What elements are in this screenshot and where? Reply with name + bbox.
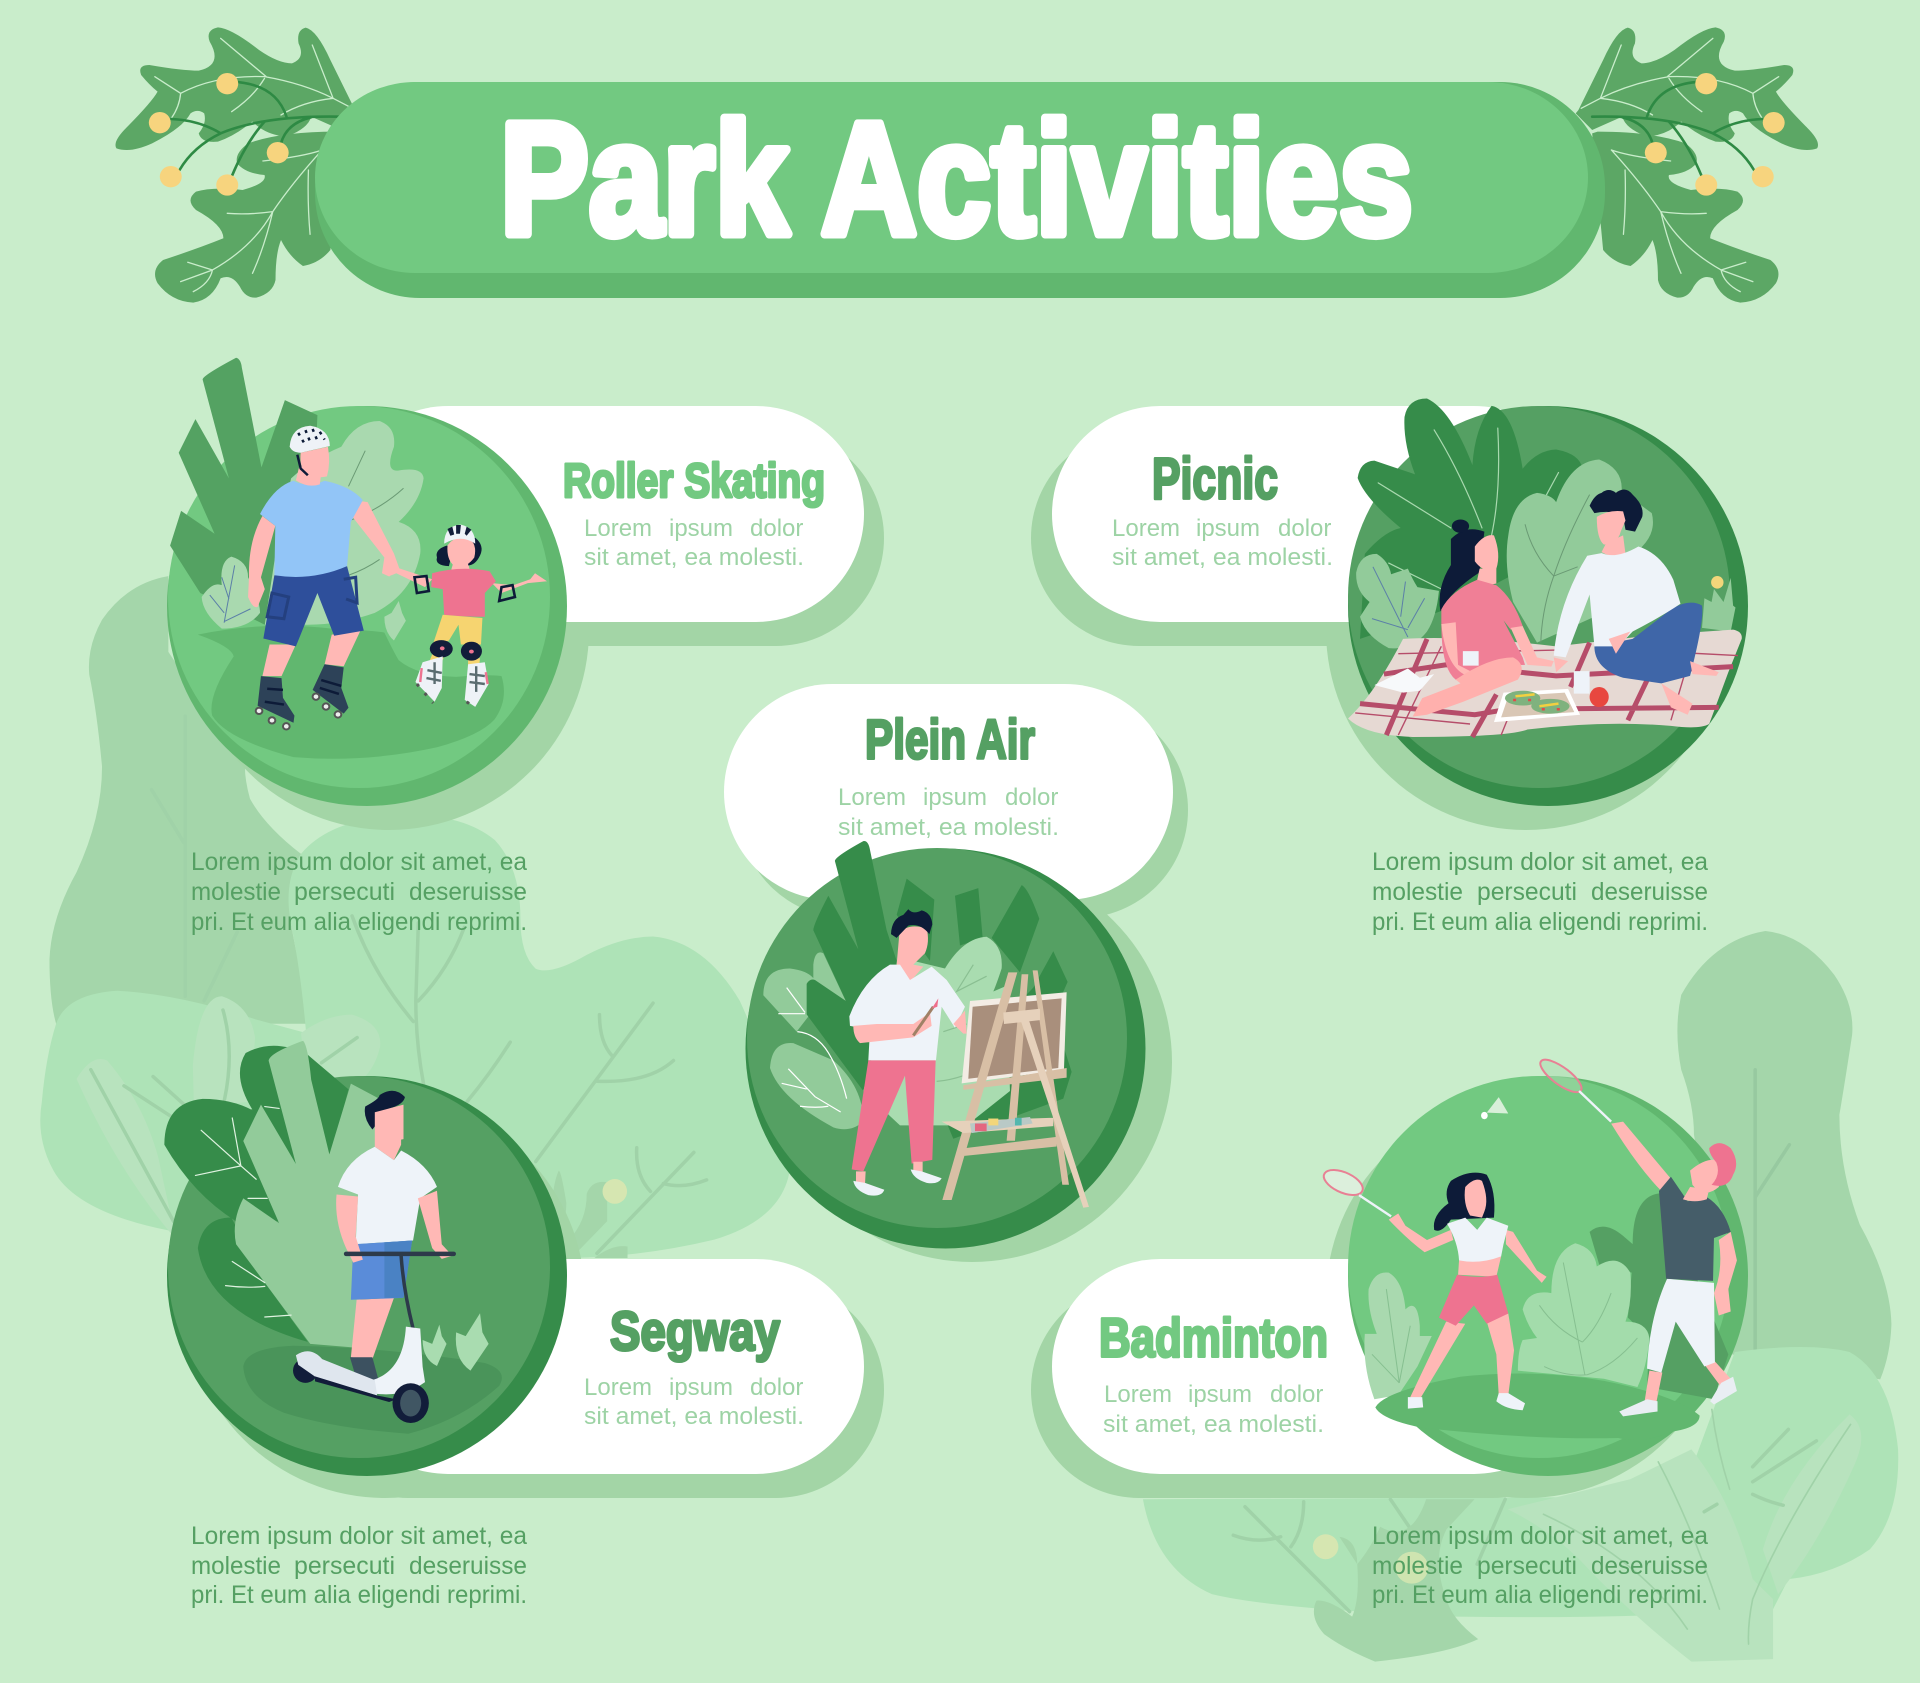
segway text: Lorem xyxy=(584,1374,652,1401)
badminton text: ipsum xyxy=(1188,1381,1252,1408)
paragraph: roller skating: persecuti xyxy=(294,878,395,906)
badminton text: sit amet, ea molesti. xyxy=(1103,1411,1324,1438)
roller skating circle xyxy=(167,406,567,806)
segway text: sit amet, ea molesti. xyxy=(584,1403,804,1430)
badminton text: dolor xyxy=(1270,1381,1323,1408)
paragraph: badminton: Lorem ipsum dolor sit amet, ea xyxy=(1372,1522,1708,1550)
panel: roller skating xyxy=(167,358,884,830)
paragraph: roller skating: deseruisse xyxy=(409,878,527,906)
picnic shadow xyxy=(1031,430,1726,830)
illustration: man on electric scooter xyxy=(164,1041,502,1434)
illustration: couple playing badminton xyxy=(1319,1055,1737,1440)
badminton text: Lorem xyxy=(1104,1381,1172,1408)
paragraph: badminton xyxy=(1372,1522,1708,1609)
roller skating heading: Roller Skating xyxy=(563,455,825,508)
segway text: dolor xyxy=(750,1374,803,1401)
panel: badminton xyxy=(1031,1055,1748,1498)
badminton text xyxy=(1103,1381,1324,1438)
plein air text: sit amet, ea molesti. xyxy=(838,814,1059,841)
paragraph: roller skating: molestie xyxy=(191,878,281,906)
paragraph: badminton: pri. Et eum alia eligendi reprimi. xyxy=(1372,1581,1708,1609)
badminton heading: Badminton xyxy=(1099,1306,1328,1368)
roller skating pill xyxy=(340,406,864,622)
plein air text: dolor xyxy=(1005,784,1058,811)
segway circle xyxy=(167,1076,567,1476)
panel: segway xyxy=(164,1041,884,1498)
roller skating text: dolor xyxy=(750,515,803,542)
segway pill xyxy=(340,1259,864,1474)
panel: plein air xyxy=(724,684,1188,1262)
paragraph: roller skating xyxy=(191,848,527,936)
picnic text: ipsum xyxy=(1196,515,1260,542)
segway shadow xyxy=(185,1098,884,1498)
plein air circle xyxy=(746,848,1146,1248)
paragraph: picnic: molestie xyxy=(1372,878,1463,906)
roller skating shadow xyxy=(189,430,884,830)
header leaves: left cluster xyxy=(115,27,358,303)
plein air text: ipsum xyxy=(923,784,987,811)
segway heading: Segway xyxy=(610,1300,780,1362)
background foliage: right xyxy=(1143,931,1898,1662)
header leaves: right cluster xyxy=(1576,27,1818,303)
paragraph: segway: molestie xyxy=(191,1552,281,1580)
picnic circle xyxy=(1348,406,1748,806)
title banner xyxy=(315,82,1605,298)
paragraph: segway: persecuti xyxy=(294,1552,395,1580)
segway text: ipsum xyxy=(669,1374,733,1401)
paragraph: roller skating: pri. Et eum alia eligendi reprimi. xyxy=(191,908,527,936)
paragraph: roller skating: Lorem ipsum dolor sit amet, ea xyxy=(191,848,527,876)
paragraph: segway: deseruisse xyxy=(409,1552,527,1580)
paragraph: badminton: persecuti xyxy=(1477,1552,1577,1580)
picnic pill xyxy=(1052,406,1582,622)
panel: picnic xyxy=(1031,398,1748,830)
illustration: painter and easel xyxy=(763,841,1089,1208)
picnic text: Lorem xyxy=(1112,515,1180,542)
illustration: father and child on roller skates xyxy=(170,358,547,759)
plein air text: Lorem xyxy=(838,784,906,811)
paragraph: picnic: pri. Et eum alia eligendi reprimi. xyxy=(1372,908,1708,936)
plein air text xyxy=(838,784,1059,841)
badminton pill xyxy=(1052,1259,1582,1474)
segway text xyxy=(584,1374,804,1430)
badminton circle xyxy=(1348,1076,1748,1476)
picnic heading: Picnic xyxy=(1152,446,1278,512)
paragraph: picnic: Lorem ipsum dolor sit amet, ea xyxy=(1372,848,1708,876)
paragraph: segway: pri. Et eum alia eligendi reprimi. xyxy=(191,1581,527,1609)
paragraph: picnic: deseruisse xyxy=(1591,878,1708,906)
illustration: couple on picnic blanket xyxy=(1348,398,1742,737)
paragraph: segway: Lorem ipsum dolor sit amet, ea xyxy=(191,1522,527,1550)
picnic text xyxy=(1112,515,1333,571)
paragraph: picnic xyxy=(1372,848,1708,936)
plein air heading: Plein Air xyxy=(865,708,1035,770)
roller skating text: Lorem xyxy=(584,515,652,542)
plein air pill xyxy=(724,684,1173,900)
roller skating text xyxy=(584,515,804,571)
paragraph: picnic: persecuti xyxy=(1477,878,1577,906)
picnic text: sit amet, ea molesti. xyxy=(1112,544,1333,571)
picnic text: dolor xyxy=(1278,515,1331,542)
title: Park Activities xyxy=(500,89,1413,268)
roller skating text: ipsum xyxy=(669,515,733,542)
background foliage: left xyxy=(40,576,791,1276)
badminton shadow xyxy=(1031,1098,1726,1498)
paragraph: badminton: molestie xyxy=(1372,1552,1463,1580)
paragraph: segway xyxy=(191,1522,527,1609)
roller skating text: sit amet, ea molesti. xyxy=(584,544,804,571)
paragraph: badminton: deseruisse xyxy=(1591,1552,1708,1580)
plein air shadow xyxy=(739,702,1188,1262)
